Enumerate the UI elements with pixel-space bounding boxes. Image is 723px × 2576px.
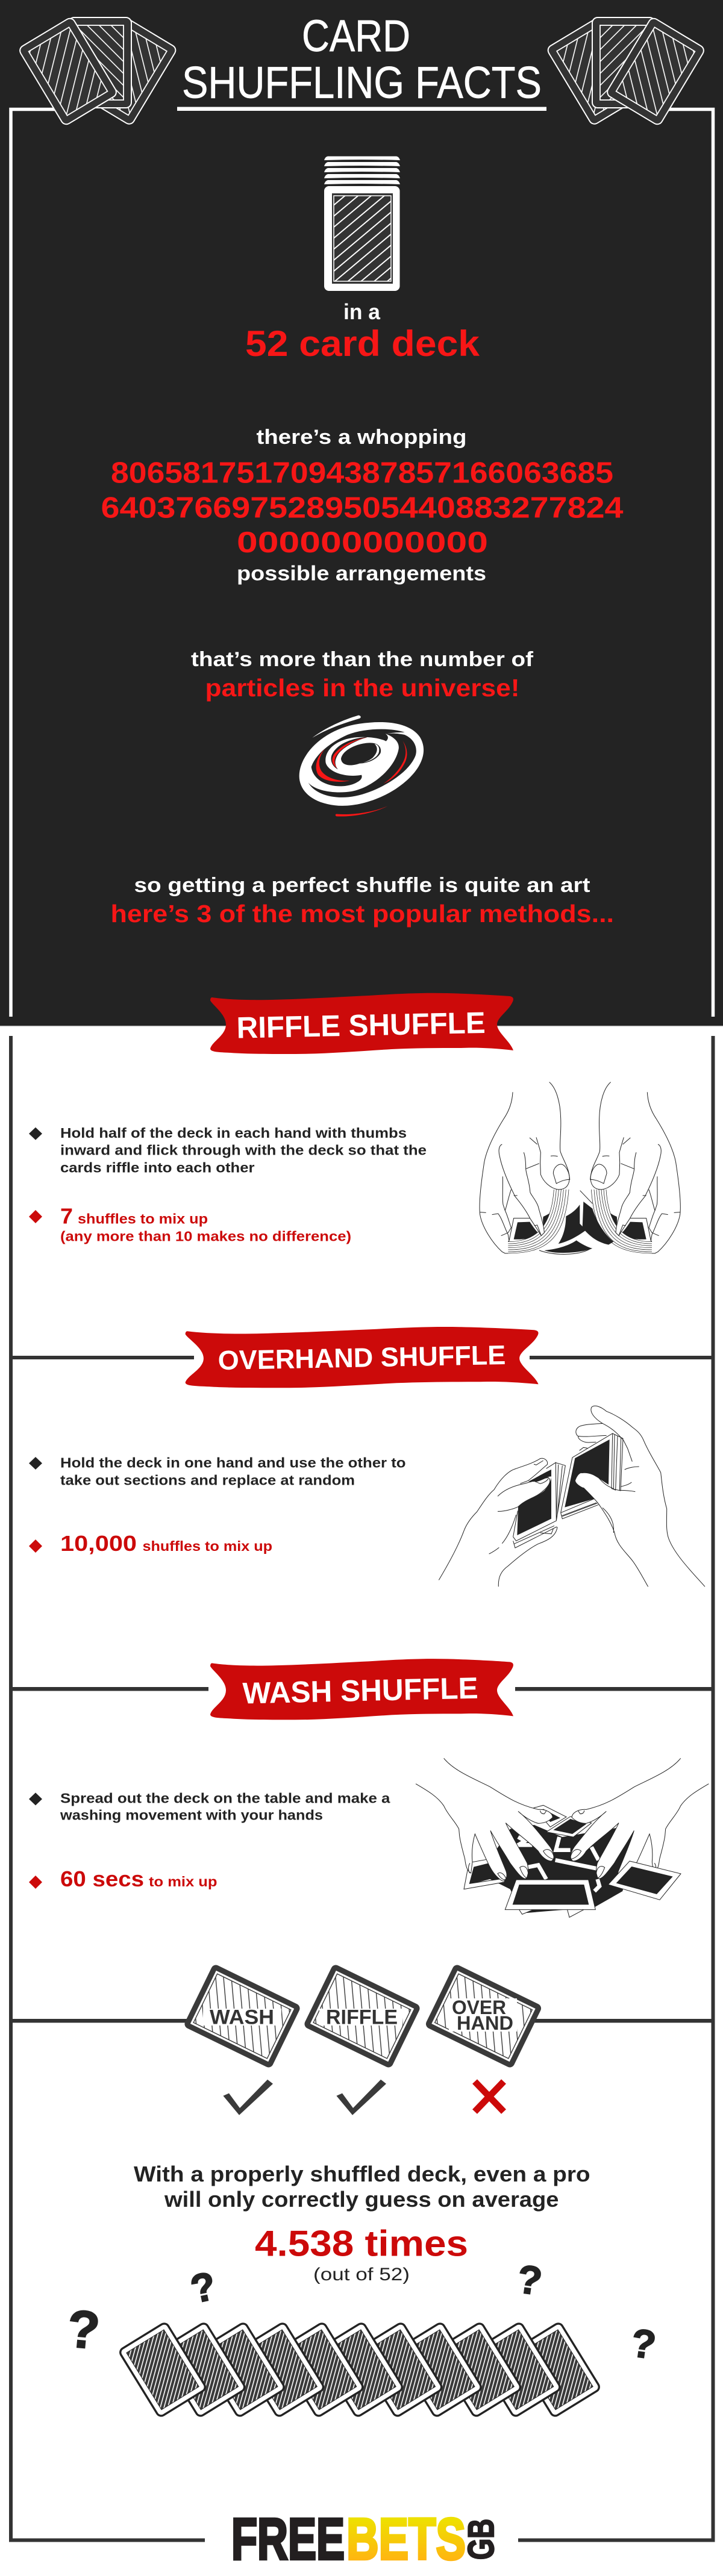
text block: riffle instructions: (any more than 10 makes no difference) xyxy=(60,1229,351,1244)
text: particles in the universe: that’s more than the number of xyxy=(191,648,534,671)
text block: wash instructions: to mix up xyxy=(149,1874,217,1889)
icon: question marks xyxy=(65,2256,659,2368)
icon: cross overhand xyxy=(475,2082,504,2112)
text block: wash instructions xyxy=(29,1791,390,1891)
icon: universe swirl xyxy=(299,716,424,816)
text: number of arrangements: there’s a whopping xyxy=(257,426,466,449)
text: in a 52 card deck: 52 card deck xyxy=(245,323,480,364)
text block: riffle instructions: inward and flick through with the deck so that the xyxy=(60,1143,427,1158)
text block: overhand instructions: Hold the deck in one hand and use the other to xyxy=(60,1455,406,1470)
text: perfect shuffle intro xyxy=(111,874,614,928)
text block: riffle instructions: cards riffle into each other xyxy=(60,1159,255,1175)
text block: riffle instructions: shuffles to mix up xyxy=(78,1211,208,1227)
text: properly shuffled deck: With a properly shuffled deck, even a pro xyxy=(134,2162,590,2186)
illustration: riffle shuffle hands xyxy=(480,1082,680,1254)
logo: freebets gb: BETS xyxy=(346,2506,466,2572)
text: number of arrangements: 8065817517094387857166063685 xyxy=(111,457,613,489)
text: number of arrangements: 6403766975289505440883277824 xyxy=(101,491,623,524)
banner: overhand shuffle xyxy=(186,1327,539,1388)
dark frame of the white section xyxy=(11,1036,713,2540)
icon: overhand card xyxy=(424,1963,543,2069)
banner: overhand shuffle: OVERHAND SHUFFLE xyxy=(218,1339,506,1376)
text block: wash instructions: Spread out the deck on the table and make a xyxy=(60,1791,390,1806)
icon: check mark riffle xyxy=(336,2080,386,2115)
text block: wash instructions: 60 secs xyxy=(60,1867,144,1891)
stat: 4.538 times out of 52: 4.538 times xyxy=(255,2224,468,2264)
banner: riffle shuffle: RIFFLE SHUFFLE xyxy=(236,1006,486,1045)
icon: deck of cards xyxy=(324,157,400,291)
text block: overhand instructions xyxy=(29,1455,406,1556)
text: properly shuffled deck: will only correctly guess on average xyxy=(164,2187,559,2212)
banner: wash shuffle: WASH SHUFFLE xyxy=(242,1671,478,1710)
banner: wash shuffle xyxy=(210,1659,513,1720)
icon: overhand card: HAND xyxy=(457,2012,513,2034)
logo: freebets gb: GB xyxy=(461,2519,501,2560)
panel: dark header section xyxy=(0,0,723,1026)
title: CARD xyxy=(302,11,410,61)
icon: question marks: ? xyxy=(515,2256,545,2304)
text: perfect shuffle intro: so getting a perfect shuffle is quite an art xyxy=(134,874,590,897)
illustration: overhand shuffle hands xyxy=(439,1406,705,1586)
stat: 4.538 times out of 52 xyxy=(255,2224,468,2284)
title xyxy=(177,11,546,111)
text: number of arrangements: 000000000000 xyxy=(237,526,488,559)
logo: freebets gb: FREE xyxy=(231,2506,345,2572)
logo: freebets gb xyxy=(231,2506,501,2572)
text: perfect shuffle intro: here’s 3 of the most popular methods... xyxy=(111,900,614,928)
icon: riffle card: RIFFLE xyxy=(326,2006,398,2029)
text: in a 52 card deck xyxy=(245,299,480,364)
icon: right fan of cards xyxy=(546,16,706,126)
icon: wash card xyxy=(183,1963,301,2069)
title: SHUFFLING FACTS xyxy=(182,58,542,107)
icon: question marks: ? xyxy=(187,2263,220,2312)
icon: question marks: ? xyxy=(65,2298,102,2360)
white frame of the dark section xyxy=(11,110,713,1017)
icon: left fan of cards xyxy=(18,16,178,126)
icon: overhand card: OVER xyxy=(452,1997,506,2018)
illustration: wash shuffle hands and cards xyxy=(416,1758,709,1917)
text block: overhand instructions: 10,000 xyxy=(60,1531,137,1556)
text block: overhand instructions: take out sections and replace at random xyxy=(60,1472,355,1488)
text: number of arrangements xyxy=(101,426,623,585)
stat: 4.538 times out of 52: (out of 52) xyxy=(313,2265,410,2284)
text block: riffle instructions xyxy=(29,1125,427,1244)
text: in a 52 card deck: in a xyxy=(343,299,381,324)
icon: wash card: WASH xyxy=(210,2006,274,2029)
icon: row of eleven cards xyxy=(119,2322,601,2418)
text: number of arrangements: possible arrangements xyxy=(237,563,486,585)
text: particles in the universe xyxy=(191,648,534,702)
text block: overhand instructions: shuffles to mix up xyxy=(142,1538,272,1554)
text block: riffle instructions: Hold half of the deck in each hand with thumbs xyxy=(60,1125,407,1141)
icon: riffle card xyxy=(303,1963,421,2069)
text block: riffle instructions: 7 xyxy=(60,1204,73,1229)
text: particles in the universe: particles in the universe! xyxy=(205,674,519,702)
banner: riffle shuffle xyxy=(210,993,513,1054)
icon: question marks: ? xyxy=(628,2320,659,2368)
text: properly shuffled deck xyxy=(134,2162,590,2212)
text block: wash instructions: washing movement with your hands xyxy=(60,1807,323,1823)
icon: check mark wash xyxy=(223,2080,273,2115)
